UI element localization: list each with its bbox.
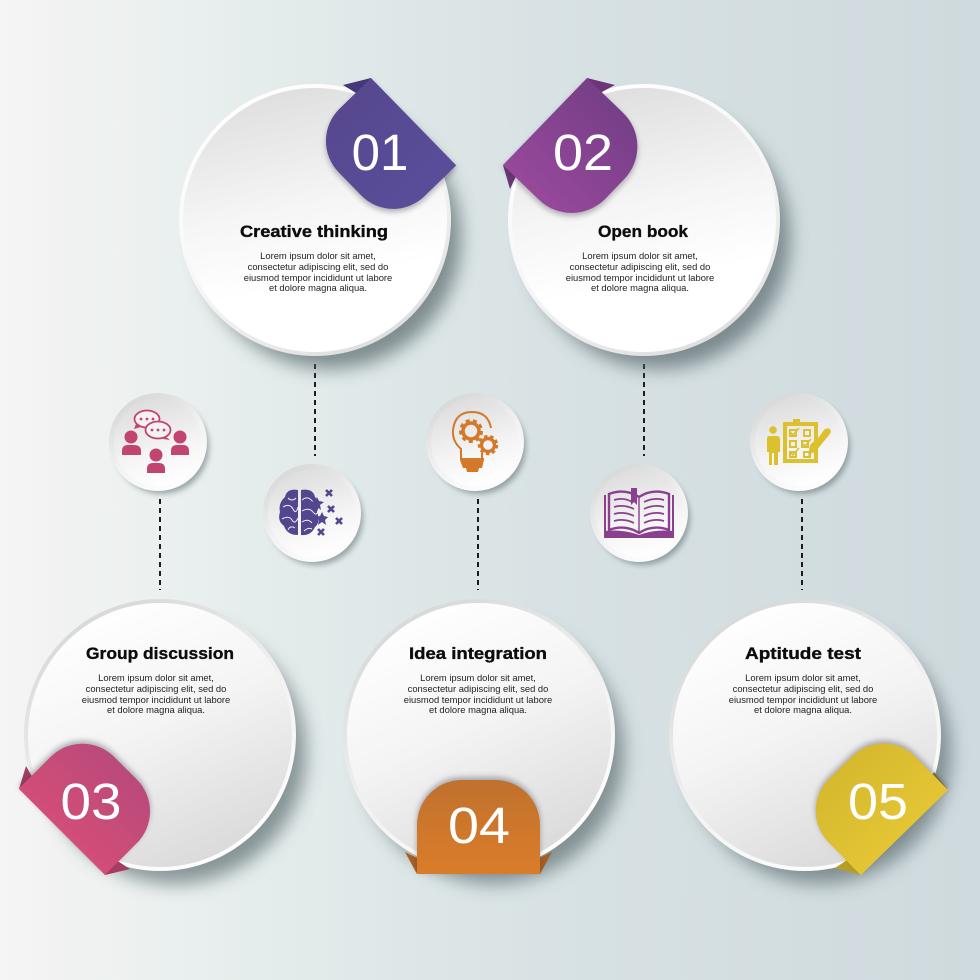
body text: eiusmod tempor incididunt ut labore xyxy=(244,272,392,283)
body text: eiusmod tempor incididunt ut labore xyxy=(729,694,877,705)
panel: 01 creative thinking xyxy=(179,78,461,369)
body text xyxy=(82,672,230,715)
body text xyxy=(244,250,392,293)
heading: Open book xyxy=(598,223,689,241)
icon badge: group discussion xyxy=(109,393,209,494)
icon: people talking xyxy=(122,410,189,473)
number tab 03: 03 xyxy=(60,773,122,830)
body text: et dolore magna aliqua. xyxy=(754,704,852,715)
icon badge: brain xyxy=(263,464,363,565)
number tab 02: 02 xyxy=(553,124,613,181)
body text: Lorem ipsum dolor sit amet, xyxy=(420,672,536,683)
heading: Group discussion xyxy=(86,645,234,663)
icon: brain with sparkles xyxy=(279,490,342,535)
body text: Lorem ipsum dolor sit amet, xyxy=(745,672,861,683)
body text: et dolore magna aliqua. xyxy=(269,282,367,293)
heading: Aptitude test xyxy=(745,645,862,663)
dashed connector: checklist icon to 05 xyxy=(801,499,803,590)
icon: book with bookmark xyxy=(605,488,673,537)
icon: person, clipboard and pencil xyxy=(767,419,831,465)
body text: consectetur adipiscing elit, sed do xyxy=(86,683,226,694)
body text: consectetur adipiscing elit, sed do xyxy=(733,683,873,694)
dashed connector: 02 to book icon xyxy=(643,364,645,456)
body text xyxy=(566,250,714,293)
body text: et dolore magna aliqua. xyxy=(107,704,205,715)
body text xyxy=(404,672,552,715)
number tab 01 xyxy=(307,78,456,230)
body text xyxy=(729,672,877,715)
dashed connector: 01 to brain icon xyxy=(314,364,316,456)
dashed connector: bulb icon to 04 xyxy=(477,499,479,590)
number tab 03 xyxy=(19,722,169,875)
body text: et dolore magna aliqua. xyxy=(591,282,689,293)
panel: 02 open book xyxy=(503,78,790,369)
number tab 04: 04 xyxy=(448,797,510,854)
body text: et dolore magna aliqua. xyxy=(429,704,527,715)
number tab 01: 01 xyxy=(352,124,408,181)
icon: bulb with gears xyxy=(453,412,497,472)
body text: Lorem ipsum dolor sit amet, xyxy=(260,250,376,261)
panel: 05 aptitude test xyxy=(669,599,951,884)
panel: 04 idea integration xyxy=(343,599,624,884)
number tab 05 xyxy=(797,722,948,875)
dashed connector: group icon to 03 xyxy=(159,499,161,590)
body text: eiusmod tempor incididunt ut labore xyxy=(404,694,552,705)
number tab 02 xyxy=(503,78,657,235)
icon badge: aptitude checklist xyxy=(750,393,850,494)
body text: consectetur adipiscing elit, sed do xyxy=(570,261,710,272)
panel: 03 group discussion xyxy=(19,599,306,884)
body text: eiusmod tempor incididunt ut labore xyxy=(566,272,714,283)
heading: Creative thinking xyxy=(240,223,388,241)
number tab 04 xyxy=(405,777,552,874)
body text: eiusmod tempor incididunt ut labore xyxy=(82,694,230,705)
heading: Idea integration xyxy=(409,645,547,663)
body text: consectetur adipiscing elit, sed do xyxy=(408,683,548,694)
number tab 05: 05 xyxy=(848,773,908,830)
body text: Lorem ipsum dolor sit amet, xyxy=(98,672,214,683)
icon badge: open book xyxy=(590,464,690,565)
body text: Lorem ipsum dolor sit amet, xyxy=(582,250,698,261)
icon badge: light bulb xyxy=(426,393,526,494)
body text: consectetur adipiscing elit, sed do xyxy=(248,261,388,272)
